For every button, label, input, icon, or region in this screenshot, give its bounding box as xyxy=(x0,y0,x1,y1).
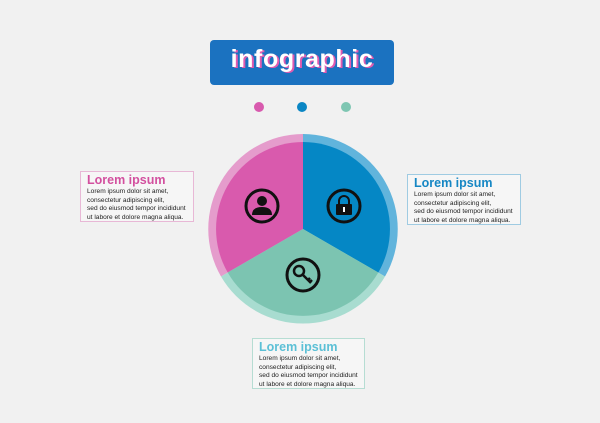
pie chart xyxy=(208,134,398,324)
icon: lock xyxy=(328,190,360,222)
text block: right: Lorem ipsum dolor sit amet, xyxy=(414,191,495,198)
text block: bottom: ut labore et dolore magna aliqua. xyxy=(259,380,355,388)
text block: bottom: Lorem ipsum xyxy=(259,340,338,354)
dot: pink xyxy=(254,102,264,112)
text block: right: Lorem ipsum xyxy=(414,176,492,190)
dot: blue xyxy=(297,102,307,112)
text block: bottom: sed do eiusmod tempor incididunt xyxy=(259,372,358,379)
icon: user xyxy=(246,190,278,222)
text block: bottom: consectetur adipiscing elit, xyxy=(259,364,336,370)
text block: left: Lorem ipsum dolor sit amet, xyxy=(87,188,168,195)
title: infographic xyxy=(231,45,373,73)
text block: right: sed do eiusmod tempor incididunt xyxy=(414,208,513,215)
text block: right xyxy=(407,174,521,225)
text block: bottom: Lorem ipsum dolor sit amet, xyxy=(259,355,340,362)
text block: right: ut labore et dolore magna aliqua. xyxy=(414,216,510,224)
dot: green xyxy=(341,102,351,112)
icon: key xyxy=(287,259,319,291)
text block: right: consectetur adipiscing elit, xyxy=(414,200,491,206)
text block: left xyxy=(80,171,194,222)
title xyxy=(210,40,394,85)
text block: left: consectetur adipiscing elit, xyxy=(87,196,164,204)
text block: bottom xyxy=(252,338,365,389)
text block: left: sed do eiusmod tempor incididunt xyxy=(87,205,186,212)
text block: left: Lorem ipsum xyxy=(87,173,166,187)
text block: left: ut labore et dolore magna aliqua. xyxy=(87,214,183,220)
